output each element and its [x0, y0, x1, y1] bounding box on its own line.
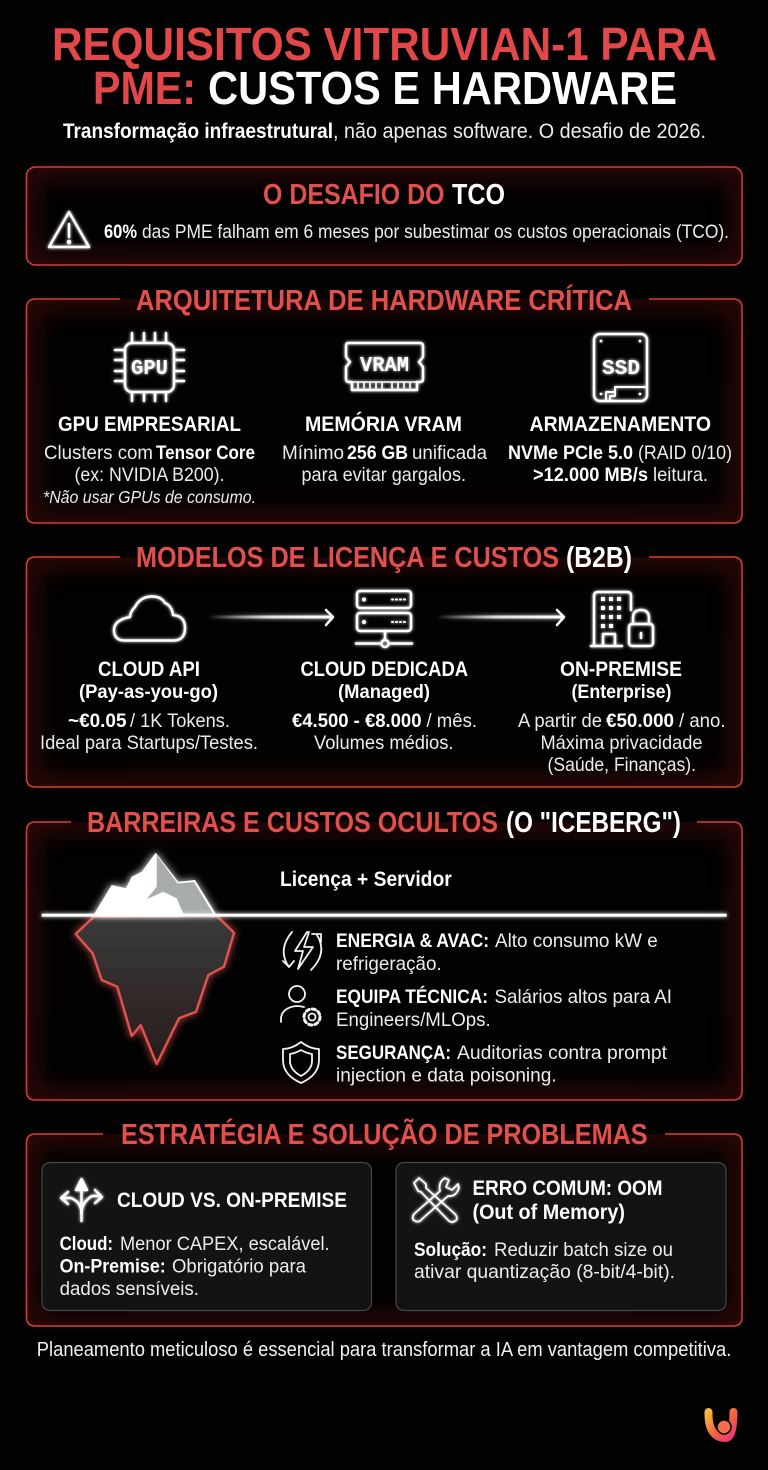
- card title: ERRO COMUM: OOM: [472, 1176, 662, 1200]
- label: licença + servidor: Licença + Servidor: [280, 867, 452, 891]
- card text: dados sensíveis.: [60, 1278, 199, 1300]
- panel: arquitetura de hardware: [26, 283, 742, 523]
- text: equipa técnica: Engineers/MLOps.: [336, 1009, 491, 1031]
- arrow: cloud api to dedicada: [208, 610, 333, 625]
- icon: SSD drive: SSD: [602, 358, 640, 381]
- heading: modelos: (B2B): [566, 542, 632, 574]
- column: memória VRAM: [282, 411, 487, 486]
- text: energia: ENERGIA & AVAC:: [336, 930, 489, 952]
- column: armazenamento: ARMAZENAMENTO: [530, 412, 711, 436]
- title: [52, 18, 717, 114]
- column: on-premise: Máxima privacidade: [540, 732, 702, 754]
- arrow: dedicada to on-premise: [436, 610, 564, 625]
- card text: [60, 1233, 330, 1300]
- column: cloud api: Ideal para Startups/Testes.: [40, 732, 258, 754]
- heading: modelos: MODELOS DE LICENÇA E CUSTOS: [136, 542, 559, 574]
- column: cloud api: [40, 657, 258, 754]
- text: 60% das PME: 60%: [104, 221, 137, 243]
- column: memória VRAM: unificada: [412, 442, 487, 464]
- title: PME:: [93, 62, 196, 114]
- icon: wrench and screwdriver: [413, 1178, 459, 1222]
- subtitle: [63, 119, 706, 143]
- column: armazenamento: >12.000 MB/s: [533, 464, 648, 486]
- column: armazenamento: NVMe PCIe 5.0: [508, 442, 633, 464]
- column: on-premise: (Enterprise): [572, 681, 672, 703]
- icon: GPU chip: GPU: [131, 358, 168, 381]
- text: energia: [336, 930, 658, 975]
- text: segurança: Auditorias contra prompt: [457, 1042, 668, 1064]
- column: memória VRAM: MEMÓRIA VRAM: [305, 411, 462, 436]
- card: cloud vs on-premise: [42, 1162, 372, 1310]
- text: equipa técnica: [336, 985, 672, 1031]
- icon: logo: [708, 1412, 734, 1438]
- card title: (Out of Memory): [472, 1200, 625, 1224]
- card text: Obrigatório para: [172, 1256, 306, 1278]
- column: armazenamento: leitura.: [653, 464, 708, 486]
- column: memória VRAM: Mínimo: [282, 442, 344, 464]
- column: armazenamento: (RAID 0/10): [638, 442, 732, 464]
- icon: shield: [283, 1042, 319, 1083]
- card title: CLOUD VS. ON-PREMISE: [117, 1188, 347, 1212]
- card text: Solução:: [414, 1239, 487, 1261]
- icon: diverging arrows: [61, 1179, 102, 1221]
- text: energia: refrigeração.: [336, 953, 442, 975]
- column: on-premise: ON-PREMISE: [560, 657, 682, 681]
- column: cloud api: / 1K Tokens.: [130, 710, 230, 732]
- icon: GPU chip: [115, 333, 184, 401]
- card text: Menor CAPEX, escalável.: [120, 1233, 330, 1255]
- column: on-premise: €50.000: [606, 710, 674, 732]
- text: energia: Alto consumo kW e: [495, 930, 658, 952]
- panel: modelos de licença: [26, 542, 742, 787]
- card text: On-Premise:: [60, 1256, 166, 1278]
- column: armazenamento: [508, 412, 732, 486]
- panel: barreiras e custos ocultos: [26, 807, 742, 1100]
- column: GPU empresarial: Clusters com: [44, 442, 153, 464]
- column: GPU empresarial: [43, 412, 256, 507]
- icon: energy and cooling: [283, 932, 321, 970]
- panel: o desafio do TCO: [26, 167, 742, 265]
- heading: barreiras: (O "ICEBERG"): [506, 807, 681, 839]
- subtitle: Transformação infraestrutural: [63, 119, 333, 143]
- column: GPU empresarial: (ex: NVIDIA B200).: [74, 464, 224, 486]
- column: cloud api: CLOUD API: [98, 657, 200, 681]
- text: segurança: injection e data poisoning.: [336, 1065, 557, 1087]
- panel: estratégia e solução: [26, 1117, 742, 1326]
- column: on-premise: [518, 657, 726, 776]
- card text: ativar quantização (8-bit/4-bit).: [414, 1261, 675, 1283]
- text: segurança: SEGURANÇA:: [336, 1042, 451, 1064]
- card text: [414, 1239, 675, 1283]
- heading: estratégia: ESTRATÉGIA E SOLUÇÃO DE PROBLEMAS: [121, 1117, 648, 1151]
- heading: o desafio do TCO: O DESAFIO DO: [263, 179, 444, 211]
- column: cloud dedicada: CLOUD DEDICADA: [300, 657, 468, 681]
- column: GPU empresarial: GPU EMPRESARIAL: [58, 412, 241, 436]
- icon: SSD drive: [594, 334, 647, 401]
- column: cloud dedicada: [292, 657, 477, 754]
- text: segurança: [336, 1042, 668, 1087]
- icon: cloud: [114, 596, 185, 640]
- column: memória VRAM: para evitar gargalos.: [302, 464, 466, 486]
- icon: person with gear: [281, 986, 320, 1025]
- column: GPU empresarial: *Não usar GPUs de consumo.: [43, 487, 256, 507]
- iceberg visible tip: [93, 853, 217, 915]
- title: CUSTOS E HARDWARE: [208, 62, 677, 114]
- icon: VRAM module: VRAM: [360, 355, 409, 378]
- column: cloud dedicada: (Managed): [338, 681, 430, 703]
- heading: arquitetura: ARQUITETURA DE HARDWARE CRÍTICA: [136, 283, 632, 317]
- column: cloud api: ~€0.05: [68, 710, 127, 732]
- subtitle: , não apenas software. O desafio de 2026.: [333, 119, 706, 143]
- icon: VRAM module: [346, 343, 423, 390]
- card: erro comum OOM: [396, 1162, 726, 1310]
- column: cloud api: (Pay-as-you-go): [79, 681, 218, 703]
- icon: server: [356, 591, 412, 647]
- column: cloud dedicada: €4.500 - €8.000: [292, 710, 422, 732]
- column: on-premise: (Saúde, Finanças).: [548, 754, 696, 776]
- heading: barreiras: BARREIRAS E CUSTOS OCULTOS: [87, 807, 498, 839]
- waterline: [42, 914, 727, 917]
- column: cloud dedicada: Volumes médios.: [314, 732, 454, 754]
- column: GPU empresarial: Tensor Core: [156, 442, 255, 464]
- iceberg underwater part: [76, 916, 234, 1064]
- icon: warning triangle: [49, 212, 89, 247]
- iceberg illustration: [42, 853, 727, 1064]
- heading: o desafio do TCO: TCO: [452, 179, 505, 211]
- column: cloud dedicada: / mês.: [426, 710, 477, 732]
- card text: Reduzir batch size ou: [494, 1239, 673, 1261]
- text: equipa técnica: EQUIPA TÉCNICA:: [336, 985, 488, 1008]
- text: equipa técnica: Salários altos para AI: [494, 986, 672, 1008]
- card title: [472, 1176, 662, 1224]
- card text: Cloud:: [60, 1233, 113, 1255]
- column: on-premise: / ano.: [679, 710, 726, 732]
- column: on-premise: A partir de: [518, 710, 602, 732]
- column: memória VRAM: 256 GB: [347, 442, 408, 464]
- icon: building with lock: [591, 592, 653, 646]
- title: REQUISITOS VITRUVIAN-1 PARA: [52, 18, 717, 70]
